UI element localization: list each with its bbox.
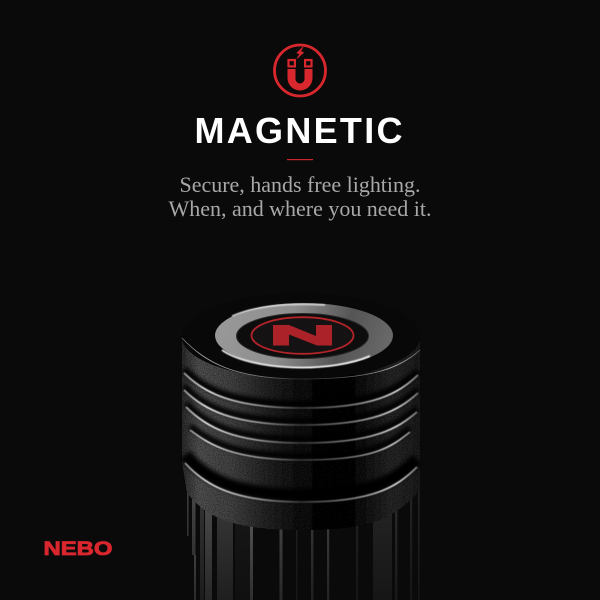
flashlight fluted body: [187, 490, 420, 600]
subtitle line 2: When, and where you need it.: [168, 196, 432, 221]
NEBO logo: NEBO: [44, 538, 112, 560]
subtitle text: [168, 172, 432, 221]
flashlight collar: [182, 338, 420, 530]
flashlight silver ring: [215, 303, 393, 368]
icon: magnet right tip: [305, 60, 312, 66]
subtitle line 1: Secure, hands free lighting.: [180, 172, 420, 197]
flashlight: [182, 293, 420, 600]
flashlight red logo ring: [252, 317, 354, 354]
icon: magnet left tip: [288, 60, 295, 66]
flashlight rim light: [182, 338, 420, 379]
flashlight ring top highlight: [232, 304, 325, 316]
flashlight top face: [182, 293, 420, 379]
icon: lightning bolt: [297, 47, 304, 58]
divider: [287, 159, 313, 160]
flashlight inner lens: [236, 314, 368, 358]
title: MAGNETIC: [194, 110, 402, 151]
flashlight ridge shadows: [184, 369, 418, 495]
icon: magnet body: [288, 69, 312, 90]
flashlight red N logo: [273, 325, 332, 346]
flashlight ring bottom highlight: [222, 350, 370, 368]
flashlight ridge highlights: [184, 373, 418, 502]
icon: magnet in circle: [274, 45, 326, 96]
